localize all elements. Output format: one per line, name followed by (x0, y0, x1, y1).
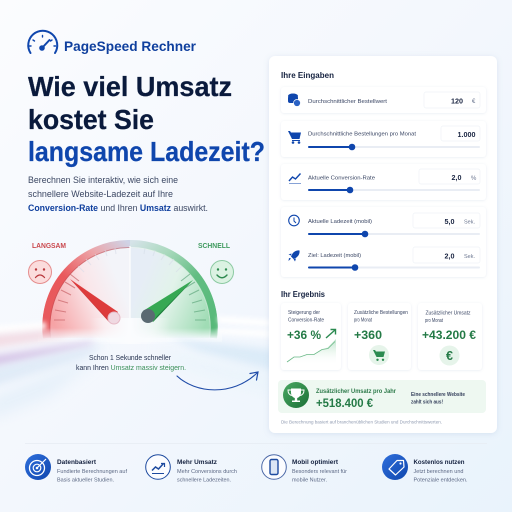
input: conversion rate: 2,0 (452, 173, 462, 182)
input group: load time: Sek. (464, 254, 475, 260)
intro text: Berechnen Sie interaktiv, wie sich eine (28, 175, 178, 185)
input: orders per month: 1.000 (458, 130, 476, 139)
result card: extra monthly revenue: Zusätzlicher Umsatz (426, 310, 471, 316)
gauge ticks (54, 248, 206, 320)
input: average order value: € (472, 99, 476, 105)
result card: extra orders (348, 303, 411, 370)
input: orders per month: Durchschnittliche Bestellungen pro Monat (308, 132, 416, 138)
result card: extra monthly revenue: pro Monat (425, 318, 443, 324)
heading: inputs: Ihre Eingaben (281, 70, 334, 80)
feature: data based (25, 454, 128, 484)
icon: cart (369, 345, 389, 365)
feature: data based: Fundierte Berechnungen auf (57, 469, 128, 475)
icon: coins (288, 94, 300, 106)
feature: free: Kostenlos nutzen (414, 459, 465, 466)
annual revenue banner: Eine schnellere Website (411, 392, 465, 398)
gauge caption: kann Ihren Umsatz massiv steigern. (76, 363, 186, 372)
result card: extra monthly revenue: +43.200 € (422, 330, 477, 342)
label: langsam: LANGSAM (32, 243, 66, 250)
icon: chart circle (146, 455, 170, 479)
heading: results: Ihr Ergebnis (281, 289, 325, 299)
feature: more revenue: Mehr Umsatz (177, 459, 218, 466)
main heading: kostet Sie (28, 104, 154, 135)
icon: speedometer (28, 31, 57, 53)
green needle (141, 280, 193, 323)
logo wordmark: PageSpeed Rechner (64, 38, 197, 54)
logo (28, 31, 197, 54)
sparkline (287, 339, 336, 365)
feature: free (382, 454, 468, 484)
label: schnell: SCHNELL (198, 243, 231, 250)
speed gauge (0, 240, 275, 420)
annual revenue banner: zahlt sich aus! (411, 400, 443, 406)
gauge caption: Schon 1 Sekunde schneller (89, 353, 172, 362)
result card: conversion increase: Conversion-Rate (288, 318, 324, 324)
icon: phone (262, 455, 286, 479)
main heading (28, 71, 265, 167)
input: average order value (281, 87, 486, 113)
main heading: Wie viel Umsatz (28, 71, 232, 102)
intro text (28, 175, 208, 213)
input: conversion rate: Aktuelle Conversion-Rate (308, 176, 375, 182)
icon: cart (288, 131, 301, 144)
footnote: Die Berechnung basiert auf branchenüblichen Studien und Durchschnittswerten. (281, 420, 442, 424)
gauge caption (76, 353, 186, 372)
input group: load time: 5,0 (444, 217, 454, 226)
intro text: schnellere Website-Ladezeit auf Ihre (28, 189, 173, 199)
icon: euro: € (446, 349, 453, 363)
icon: target (25, 454, 51, 480)
gauge face (42, 240, 130, 338)
input group: load time (281, 207, 486, 277)
feature strip (25, 443, 487, 484)
feature: mobile: Besonders relevant für (292, 469, 347, 475)
icon: price tag (382, 454, 408, 480)
input group: load time: 2,0 (444, 252, 454, 260)
feature: mobile: Mobil optimiert (292, 459, 339, 466)
input group: load time: Sek. (464, 220, 475, 226)
feature: mobile: mobile Nutzer. (292, 478, 327, 484)
input: conversion rate: % (471, 176, 477, 182)
icon: up arrow (326, 330, 336, 338)
feature: more revenue: schnellere Ladezeiten. (177, 478, 231, 484)
arrow to results (177, 372, 258, 390)
feature: more revenue (146, 455, 237, 484)
icon: clock (289, 215, 299, 226)
feature: mobile (262, 455, 347, 484)
gauge center glow (90, 318, 170, 344)
gauge bottom fade (38, 328, 222, 342)
annual revenue banner: Zusätzlicher Umsatz pro Jahr (316, 388, 396, 395)
input: conversion rate (281, 164, 486, 200)
annual revenue banner (278, 380, 486, 413)
feature: data based: Basis aktueller Studien. (57, 478, 114, 484)
result card: extra orders: +360 (354, 328, 382, 342)
panel: calculator (269, 56, 497, 433)
icon: sad face (28, 260, 52, 284)
result card: conversion increase: Steigerung der (288, 310, 320, 316)
input: average order value: Durchschnittlicher Bestellwert (308, 99, 387, 105)
gauge rim (46, 244, 214, 338)
intro text: Conversion-Rate und Ihren Umsatz auswirkt. (28, 203, 208, 213)
result card: extra orders: Zusätzliche Bestellungen (354, 310, 408, 316)
input: average order value: 120 (451, 96, 463, 106)
input group: load time: Aktuelle Ladezeit (mobil) (308, 219, 372, 225)
feature: more revenue: Mehr Conversions durch (177, 469, 237, 475)
input: orders per month (281, 121, 486, 157)
result card: extra monthly revenue (418, 303, 482, 370)
main heading: langsame Ladezeit? (28, 136, 265, 167)
feature: free: Jetzt berechnen und (414, 469, 464, 475)
icon: rocket (288, 250, 300, 262)
icon: trend line (289, 174, 301, 184)
result card: conversion increase: +36 % (287, 328, 321, 342)
result card: extra orders: pro Monat (354, 318, 372, 324)
speed light streaks (0, 316, 275, 420)
result card: conversion increase (281, 303, 341, 370)
feature: data based: Datenbasiert (57, 459, 97, 466)
feature: free: Potenziale entdecken. (414, 478, 468, 484)
input group: load time: Ziel: Ladezeit (mobil) (308, 253, 361, 259)
icon: happy face (210, 260, 234, 284)
red needle (70, 279, 120, 324)
annual revenue banner: +518.400 € (316, 398, 374, 410)
icon: trophy (283, 382, 309, 408)
